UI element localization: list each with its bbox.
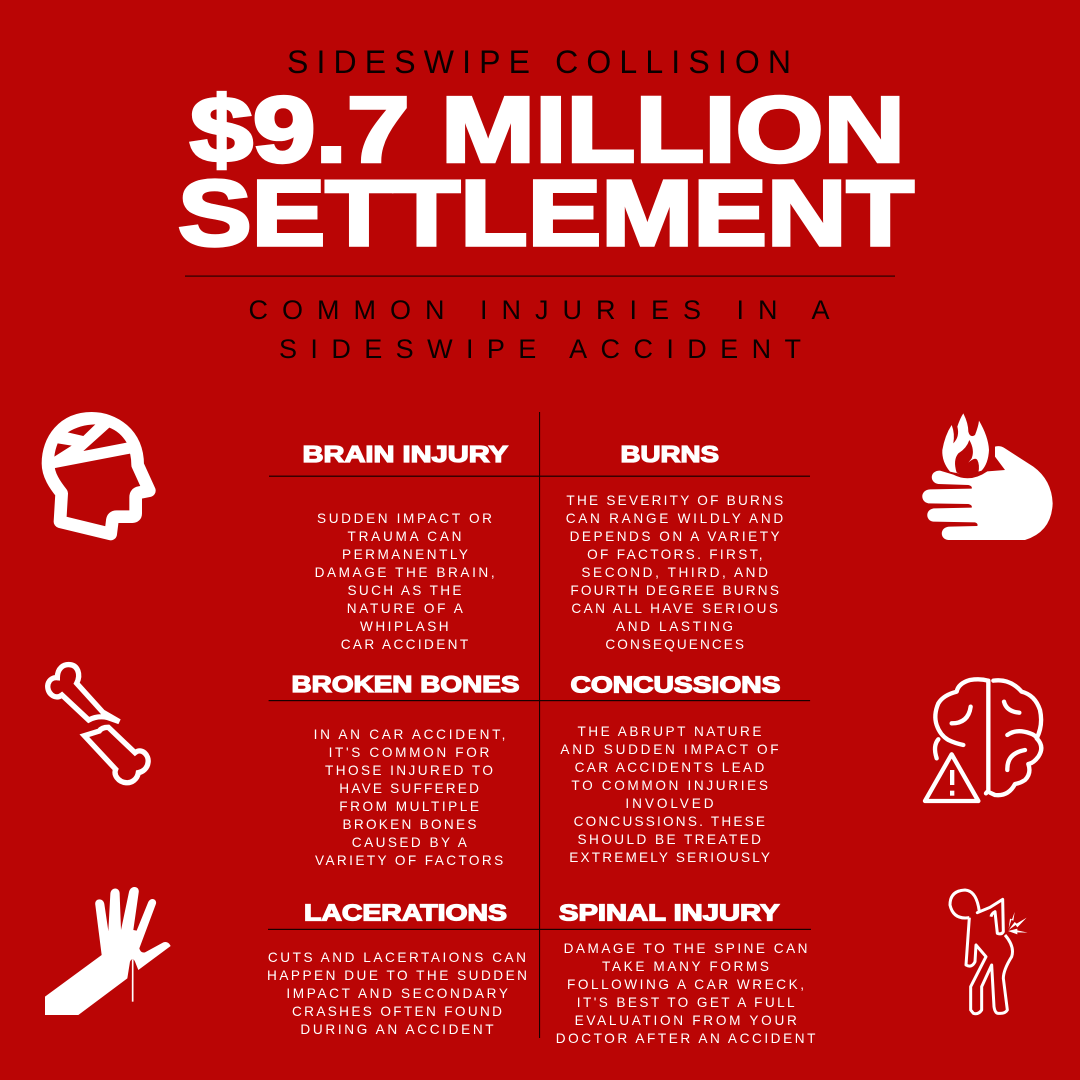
text: brain injury description: NATURE OF A (347, 601, 464, 616)
text: burns description: AND LASTING (616, 619, 733, 634)
text: burns description: CAN ALL HAVE SERIOUS (571, 601, 778, 616)
icon: cut hand (45, 887, 171, 1015)
heading: brain injury: BRAIN INJURY (302, 441, 508, 467)
text: spinal injury description: EVALUATION FROM YOUR (575, 1013, 797, 1028)
text: concussions description: AND SUDDEN IMPACT OF (560, 742, 779, 757)
text: lacerations description: IMPACT AND SECONDARY (286, 986, 508, 1001)
heading: lacerations: LACERATIONS (304, 900, 507, 926)
text: brain injury description: WHIPLASH (360, 619, 449, 634)
text: burns description (566, 493, 783, 652)
text: broken bones description: FROM MULTIPLE (339, 799, 479, 814)
text: concussions description: THE ABRUPT NATURE (578, 724, 761, 739)
icon: broken bone (48, 665, 148, 783)
text: burns description: CAN RANGE WILDLY AND (566, 511, 783, 526)
heading: spinal injury: SPINAL INJURY (559, 900, 780, 926)
panel: lacerations (267, 900, 527, 1037)
text: brain injury description: TRAUMA CAN (348, 529, 462, 544)
icon: bandaged head (48, 418, 149, 534)
text: spinal injury description: FOLLOWING A CAR WRECK, (567, 977, 804, 992)
text: concussions description: EXTREMELY SERIOUSLY (569, 850, 770, 865)
text: concussions description: CONCUSSIONS. THESE (574, 814, 765, 829)
text: brain injury description (315, 511, 495, 652)
text: lacerations description: DURING AN ACCIDENT (300, 1022, 494, 1037)
text: brain injury description: SUCH AS THE (348, 583, 462, 598)
text: burns description: CONSEQUENCES (605, 637, 744, 652)
icon: person with back pain (950, 890, 1028, 1014)
text: broken bones description: CAUSED BY A (352, 835, 468, 850)
text: brain injury description: SUDDEN IMPACT OR (317, 511, 492, 526)
panel: spinal injury (556, 900, 815, 1046)
text: broken bones description: THOSE INJURED TO (325, 763, 493, 778)
panel: brain injury (302, 441, 508, 652)
text: broken bones description: IT'S COMMON FOR (329, 745, 489, 760)
icon: burning hand (922, 413, 1053, 540)
text: burns description: THE SEVERITY OF BURNS (566, 493, 783, 508)
heading: concussions: CONCUSSIONS (570, 672, 780, 698)
text: broken bones description: HAVE SUFFERED (339, 781, 479, 796)
text: lacerations description: CRASHES OFTEN FOUND (292, 1004, 502, 1019)
text: spinal injury description (556, 941, 815, 1046)
heading: burns: BURNS (620, 441, 719, 467)
text: broken bones description: VARIETY OF FACTORS (315, 853, 503, 868)
text: brain injury description: PERMANENTLY (342, 547, 468, 562)
icon: brain with warning (925, 679, 1041, 801)
text: concussions description: INVOLVED (625, 796, 714, 811)
title line 2: settlement: SETTLEMENT (178, 161, 914, 265)
panel: broken bones (292, 671, 520, 868)
text: spinal injury description: DOCTOR AFTER AN ACCIDENT (556, 1031, 815, 1046)
text: concussions description: TO COMMON INJURIES (571, 778, 768, 793)
text: spinal injury description: TAKE MANY FORMS (602, 959, 769, 974)
text: brain injury description: CAR ACCIDENT (341, 637, 468, 652)
text: burns description: SECOND, THIRD, AND (581, 565, 768, 580)
panel: burns (566, 441, 783, 652)
text: spinal injury description: DAMAGE TO THE SPINE CAN (564, 941, 808, 956)
text: burns description: OF FACTORS. FIRST, (587, 547, 762, 562)
text: concussions description: CAR ACCIDENTS LEAD (575, 760, 764, 775)
subtitle: COMMON INJURIES IN A (248, 295, 830, 325)
header (178, 44, 914, 364)
text: concussions description (560, 724, 779, 865)
text: burns description: DEPENDS ON A VARIETY (570, 529, 780, 544)
text: lacerations description: CUTS AND LACERTAIONS CAN (268, 950, 526, 965)
text: brain injury description: DAMAGE THE BRAIN, (315, 565, 495, 580)
text: broken bones description: IN AN CAR ACCIDENT, (314, 727, 505, 742)
text: lacerations description: HAPPEN DUE TO THE SUDDEN (267, 968, 527, 983)
eyebrow: sideswipe collision: SIDESWIPE COLLISION (287, 44, 791, 80)
text: broken bones description: BROKEN BONES (342, 817, 476, 832)
text: lacerations description (267, 950, 527, 1037)
text: broken bones description (314, 727, 505, 868)
panel: concussions (560, 672, 780, 865)
subtitle (248, 295, 830, 364)
title line 1: settlement amount: $9.7 MILLION (190, 78, 905, 182)
heading: broken bones: BROKEN BONES (292, 671, 520, 697)
text: spinal injury description: IT'S BEST TO GET A FULL (577, 995, 795, 1010)
subtitle: SIDESWIPE ACCIDENT (279, 334, 801, 364)
text: burns description: FOURTH DEGREE BURNS (570, 583, 779, 598)
text: concussions description: SHOULD BE TREATED (578, 832, 761, 847)
